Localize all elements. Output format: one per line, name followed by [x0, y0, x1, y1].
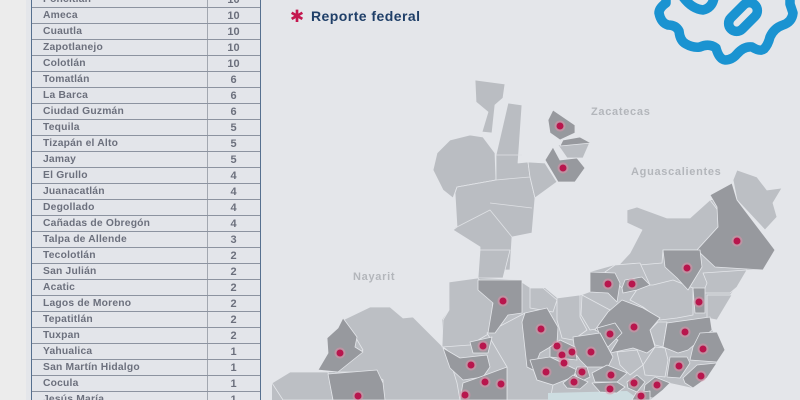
row: El Grullo	[32, 167, 260, 184]
row: El Grullo: 4	[230, 170, 237, 182]
row: Jamay: Jamay	[43, 154, 76, 165]
row: Cuautla: Cuautla	[43, 26, 82, 37]
north region: light municipalities	[433, 80, 590, 278]
row: Juanacatlán	[32, 183, 260, 200]
row: Tomatlán: 6	[230, 74, 237, 86]
row: Talpa de Allende: 3	[230, 234, 237, 246]
row: Tuxpan	[32, 327, 260, 344]
label: Zacatecas: Zacatecas	[591, 106, 651, 118]
legend: Reporte federal	[290, 7, 420, 27]
row: La Barca: 6	[230, 90, 237, 102]
row: Cañadas de Obregón: 4	[230, 218, 237, 230]
row: Zapotlanejo: 10	[227, 42, 240, 54]
row: Colotlán	[32, 55, 260, 72]
row: Talpa de Allende	[32, 231, 260, 248]
municipalities with federal reports: dark	[318, 110, 775, 400]
row: Ameca: Ameca	[43, 10, 78, 21]
row: La Barca: La Barca	[43, 90, 88, 101]
row: Jesús María	[32, 391, 260, 400]
row: Tepatitlán	[32, 311, 260, 328]
row: Tuxpan: Tuxpan	[43, 330, 80, 341]
row: Ciudad Guzmán: Ciudad Guzmán	[43, 106, 124, 117]
row: San Martín Hidalgo: 1	[230, 362, 237, 374]
row: Degollado: Degollado	[43, 202, 95, 213]
row: Jamay: 5	[230, 154, 237, 166]
lake Chapala	[548, 391, 640, 400]
row: Colotlán: Colotlán	[43, 58, 86, 69]
legend: Reporte federal: ✱	[290, 7, 304, 27]
row: Acatic	[32, 279, 260, 296]
row: Zapotlanejo: Zapotlanejo	[43, 42, 103, 53]
row: Poncitlán	[32, 0, 260, 8]
row: Tepatitlán: 2	[230, 314, 237, 326]
row: San Martín Hidalgo	[32, 359, 260, 376]
label: Nayarit: Nayarit	[353, 271, 395, 283]
row: Degollado: 4	[230, 202, 237, 214]
row: Tizapán el Alto: Tizapán el Alto	[43, 138, 118, 149]
row: San Julián: 2	[230, 266, 237, 278]
row: La Barca	[32, 87, 260, 104]
row: Cañadas de Obregón: Cañadas de Obregón	[43, 218, 150, 229]
row: Tequila: Tequila	[43, 122, 80, 133]
row: San Julián: San Julián	[43, 266, 96, 277]
west and south: municipal outlines	[272, 170, 782, 400]
row: Jamay	[32, 151, 260, 168]
southern base: light municipalities	[272, 200, 775, 400]
row: Cuautla: 10	[227, 26, 240, 38]
row: Lagos de Moreno: Lagos de Moreno	[43, 298, 131, 309]
row: Degollado	[32, 199, 260, 216]
row: Tuxpan: 2	[230, 330, 237, 342]
row: Tepatitlán: Tepatitlán	[43, 314, 93, 325]
icon: blue gear with pills	[659, 0, 793, 60]
inner boundaries, north	[455, 155, 532, 237]
row: Yahualica: 1	[230, 346, 237, 358]
row: Tecolotlán	[32, 247, 260, 264]
row: Tequila: 5	[230, 122, 237, 134]
row: Tequila	[32, 119, 260, 136]
row: Cocula: Cocula	[43, 378, 79, 389]
row: Tizapán el Alto	[32, 135, 260, 152]
row: Talpa de Allende: Talpa de Allende	[43, 234, 127, 245]
row: Acatic: 2	[230, 282, 237, 294]
map: Jalisco municipalities	[272, 80, 782, 400]
row: El Grullo: El Grullo	[43, 170, 88, 181]
row: Juanacatlán: Juanacatlán	[43, 186, 105, 197]
row: Tecolotlán: 2	[230, 250, 237, 262]
row: Tecolotlán: Tecolotlán	[43, 250, 96, 261]
row: Cocula: 1	[230, 378, 237, 390]
table: cases by municipality	[31, 0, 261, 400]
row: Lagos de Moreno: 2	[230, 298, 237, 310]
label: Aguascalientes: Aguascalientes	[631, 166, 722, 178]
row: Yahualica: Yahualica	[43, 346, 92, 357]
federal report markers	[336, 122, 740, 400]
row: San Martín Hidalgo: San Martín Hidalgo	[43, 362, 140, 373]
row: Colotlán: 10	[227, 58, 240, 70]
row: Cocula	[32, 375, 260, 392]
row: Ciudad Guzmán	[32, 103, 260, 120]
row: Tizapán el Alto: 5	[230, 138, 237, 150]
row: Tomatlán: Tomatlán	[43, 74, 90, 85]
row: Tomatlán	[32, 71, 260, 88]
row: San Julián	[32, 263, 260, 280]
row: Ameca: 10	[227, 10, 240, 22]
row: Yahualica	[32, 343, 260, 360]
row: Lagos de Moreno	[32, 295, 260, 312]
row: Ciudad Guzmán: 6	[230, 106, 237, 118]
row: Acatic: Acatic	[43, 282, 75, 293]
row: Cañadas de Obregón	[32, 215, 260, 232]
legend: Reporte federal: Reporte federal	[311, 8, 420, 24]
row: Juanacatlán: 4	[230, 186, 237, 198]
row: Ameca	[32, 7, 260, 24]
row: Cuautla	[32, 23, 260, 40]
row: Zapotlanejo	[32, 39, 260, 56]
